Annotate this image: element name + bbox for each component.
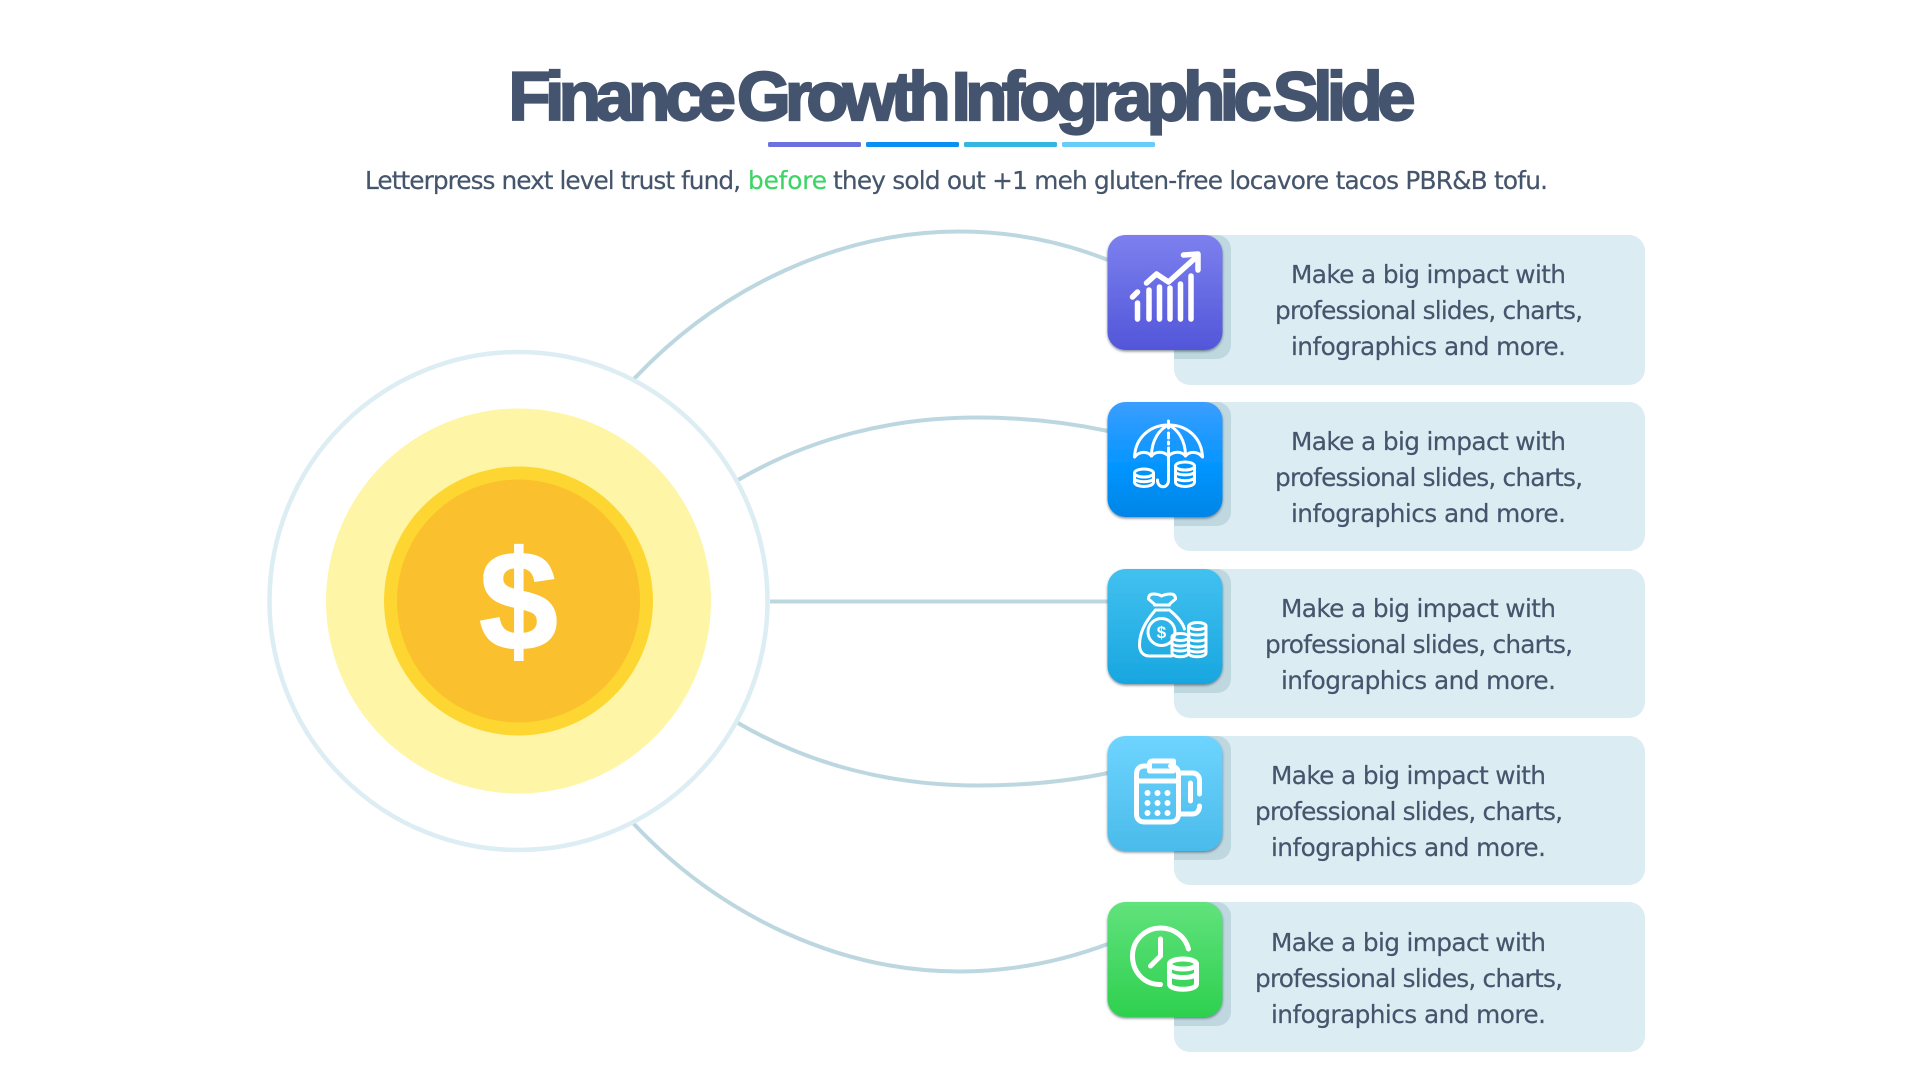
panel 1 text: infographics and more. bbox=[1291, 332, 1566, 361]
panel 2 text: Make a big impact with bbox=[1291, 427, 1566, 456]
row 1 bbox=[1108, 235, 1645, 385]
panel 2 text: professional slides, charts, bbox=[1275, 463, 1583, 492]
panel 1 text: Make a big impact with bbox=[1291, 260, 1566, 289]
icon tile 2 bbox=[1108, 402, 1222, 517]
panel 4 bbox=[1174, 736, 1645, 885]
orange coin bbox=[397, 480, 640, 722]
panel 3 text: professional slides, charts, bbox=[1265, 630, 1573, 659]
panel 5 text bbox=[1255, 928, 1563, 1029]
icon tile 1 bbox=[1108, 235, 1222, 350]
title: Finance Growth Infographic Slide bbox=[508, 58, 1416, 135]
panel 5 text: infographics and more. bbox=[1271, 1000, 1546, 1029]
icon: umbrella with coins bbox=[1134, 421, 1202, 487]
gold rim bbox=[384, 466, 653, 736]
subtitle: they sold out +1 meh gluten-free locavore tacos PBR&B tofu. bbox=[833, 166, 1548, 195]
subtitle: before bbox=[748, 166, 827, 195]
panel 5 text: Make a big impact with bbox=[1271, 928, 1546, 957]
panel 5 bbox=[1174, 902, 1645, 1052]
row 2 bbox=[1108, 402, 1645, 551]
icon: money bag with coins bbox=[1140, 594, 1206, 657]
panel 4 text: infographics and more. bbox=[1271, 833, 1546, 862]
icon tile 4 bbox=[1108, 736, 1222, 851]
panel 2 shadow block bbox=[1174, 402, 1231, 526]
panel 1 text bbox=[1275, 260, 1583, 361]
row 3 bbox=[1108, 569, 1645, 718]
pale yellow disc bbox=[326, 408, 711, 794]
panel 2 bbox=[1174, 402, 1645, 551]
panel 2 text bbox=[1275, 427, 1583, 528]
subtitle: Letterpress next level trust fund, bbox=[365, 166, 741, 195]
icon tile 5 bbox=[1108, 902, 1222, 1017]
subtitle bbox=[365, 166, 1548, 195]
panel 3 text: Make a big impact with bbox=[1281, 594, 1556, 623]
panel 3 bbox=[1174, 569, 1645, 718]
connector lines bbox=[633, 232, 1108, 972]
panel 4 text: Make a big impact with bbox=[1271, 761, 1546, 790]
dollar sign: $ bbox=[479, 522, 558, 680]
central coin graphic bbox=[270, 352, 768, 850]
icon tile 3 bbox=[1108, 569, 1222, 684]
icon: clock with coin stack bbox=[1132, 928, 1196, 989]
row 4 bbox=[1108, 736, 1645, 885]
panel 4 text: professional slides, charts, bbox=[1255, 797, 1563, 826]
panel 4 text bbox=[1255, 761, 1563, 862]
panel 3 shadow block bbox=[1174, 569, 1231, 693]
icon: growth chart bbox=[1132, 254, 1198, 319]
outer ring bbox=[270, 352, 768, 850]
panel 2 text: infographics and more. bbox=[1291, 499, 1566, 528]
panel 1 shadow block bbox=[1174, 235, 1231, 359]
icon: money bag with coins: $ bbox=[1157, 623, 1167, 642]
panel 1 text: professional slides, charts, bbox=[1275, 296, 1583, 325]
row 5 bbox=[1108, 902, 1645, 1052]
panel 5 shadow block bbox=[1174, 902, 1231, 1026]
panel 1 bbox=[1174, 235, 1645, 385]
panel 5 text: professional slides, charts, bbox=[1255, 964, 1563, 993]
panel 4 shadow block bbox=[1174, 736, 1231, 860]
panel 3 text bbox=[1265, 594, 1573, 695]
icon: card terminal bbox=[1136, 761, 1200, 822]
panel 3 text: infographics and more. bbox=[1281, 666, 1556, 695]
title underline bars bbox=[768, 142, 1155, 147]
